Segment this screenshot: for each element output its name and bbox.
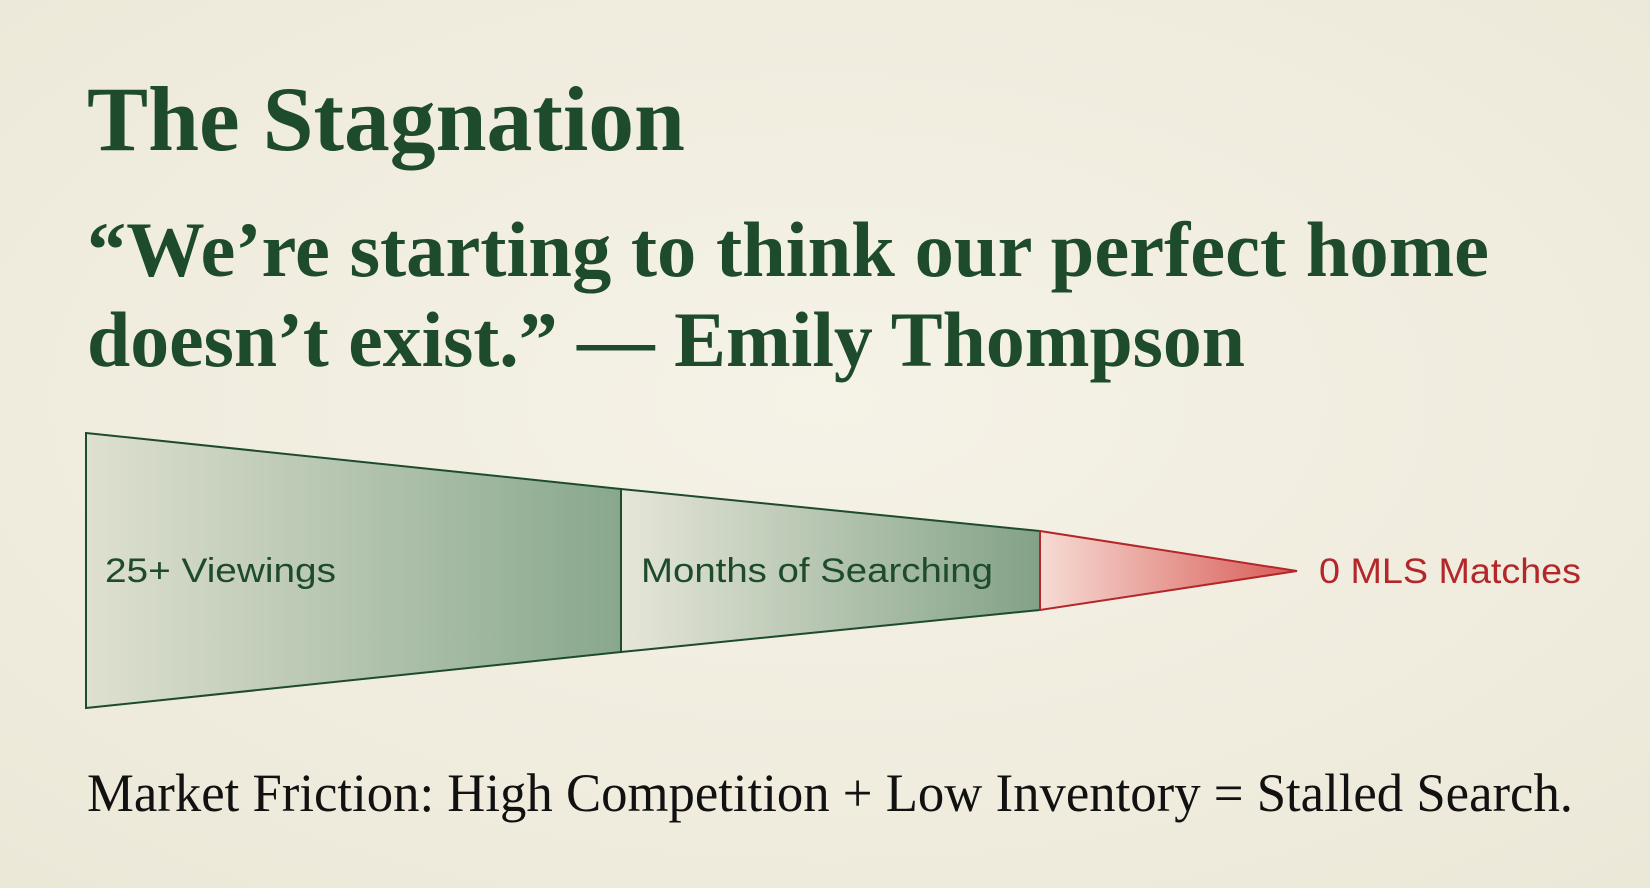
funnel segment: 25+ Viewings [86,433,621,708]
quote: “We’re starting to think our perfect home [87,206,1489,293]
title: The Stagnation [87,68,685,170]
funnel segment: Months of Searching: Months of Searching [641,552,993,590]
funnel chart [86,433,1581,708]
label: 0 MLS Matches: 0 MLS Matches [1319,552,1581,591]
footer statement: Market Friction: High Competition + Low Inventory = Stalled Search. [87,763,1573,823]
funnel segment: 25+ Viewings: 25+ Viewings [105,552,336,590]
funnel segment: Months of Searching [621,489,1040,652]
quote: doesn’t exist.” — Emily Thompson [87,296,1245,383]
funnel segment: red tip [1040,531,1297,610]
quote [87,206,1489,383]
